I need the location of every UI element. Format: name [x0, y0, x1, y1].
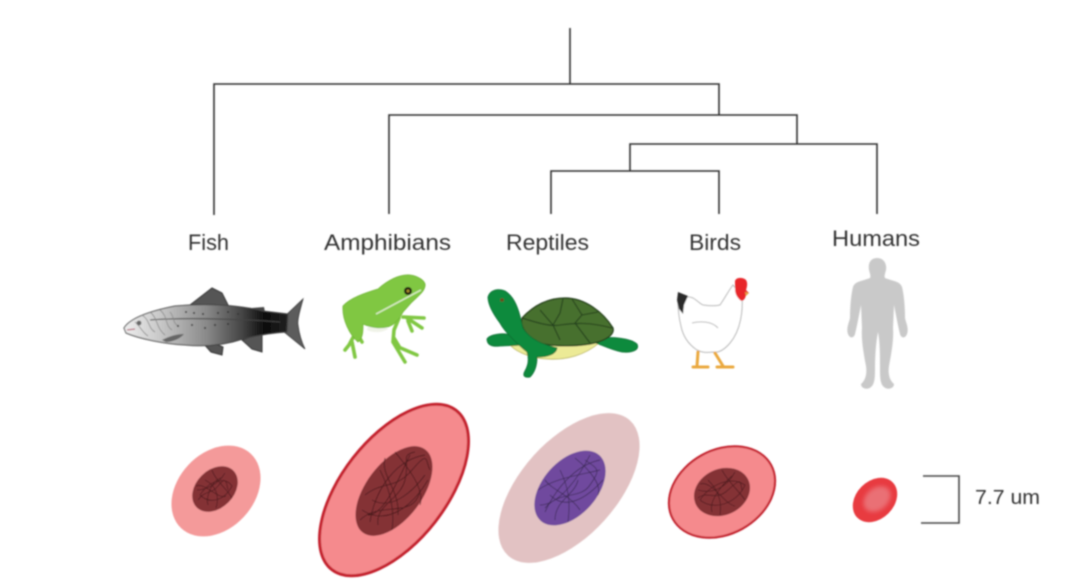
icon: chicken	[677, 278, 749, 367]
icon: frog	[343, 275, 425, 362]
icon: fish	[124, 288, 305, 355]
label: Birds: Birds	[689, 230, 741, 255]
cell: human	[844, 469, 906, 531]
cell: fish	[153, 428, 279, 554]
label: Humans: Humans	[832, 226, 920, 251]
label: Fish: Fish	[188, 230, 229, 255]
label: Reptiles: Reptiles	[506, 230, 589, 255]
icon: human silhouette	[847, 258, 908, 389]
label: Amphibians: Amphibians	[324, 230, 451, 255]
phylogenetic tree	[214, 28, 877, 215]
icon: turtle	[487, 290, 638, 377]
scale label: 7.7 um	[975, 487, 1040, 509]
cell: amphibian	[291, 378, 497, 586]
cell: reptile	[472, 388, 666, 586]
scale bracket	[921, 476, 959, 523]
cell: bird	[653, 428, 791, 556]
